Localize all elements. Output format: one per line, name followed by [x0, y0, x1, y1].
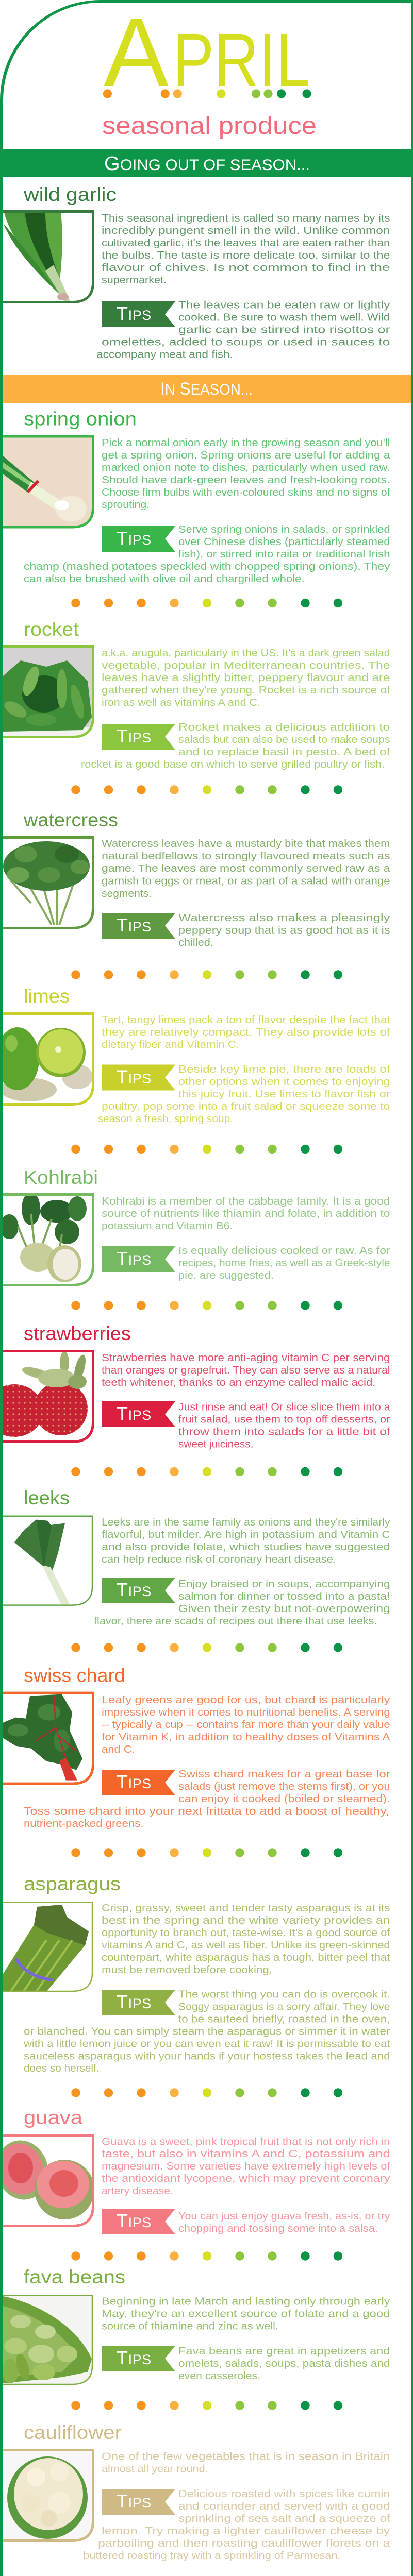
tips text: salads but can also be used to make soups	[178, 734, 390, 745]
body text	[102, 838, 391, 900]
dots divider	[71, 599, 342, 607]
tips text: omelets, salads, soups, pasta dishes and	[178, 2358, 390, 2369]
body text: gathered when they're young. Rocket is a rich source of	[102, 685, 390, 696]
tips text	[23, 1989, 390, 2074]
body text: supermarket.	[102, 275, 167, 286]
section: strawberries	[0, 1323, 390, 1450]
tips text: this juicy fruit. Use limes to flavor fish or	[178, 1089, 390, 1100]
section: rocket	[0, 619, 390, 770]
body text	[102, 1694, 390, 1755]
tips text: to be sauteed briefly, roasted in the oven,	[178, 2014, 390, 2025]
body text: natural bedfellows to strongly flavoured meats such as	[102, 851, 390, 862]
section: leeks	[0, 1487, 390, 1627]
tips text: The worst thing you can do is overcook it.	[178, 1989, 390, 2001]
tips text: chilled.	[178, 937, 213, 948]
tips text	[94, 1579, 390, 1627]
body text	[102, 213, 390, 286]
tips banner	[102, 1770, 175, 1795]
tips text: Serve spring onions in salads, or sprinkled	[178, 524, 390, 535]
heading: Kohlrabi	[24, 1167, 98, 1188]
tips banner	[102, 2209, 175, 2234]
tips banner	[102, 2346, 175, 2371]
body text: Kohlrabi is a member of the cabbage family. It is a good	[102, 1196, 390, 1207]
tips text	[178, 1402, 390, 1450]
dots divider	[71, 1145, 342, 1154]
tips banner: TIPS	[117, 725, 152, 747]
heading: wild garlic	[23, 184, 117, 205]
tips text: Toss some chard into your next frittata to add a boost of healthy,	[24, 1806, 389, 1817]
body text: segments.	[102, 888, 152, 900]
body text: source of nutrients like thiamin and folate, in addition to	[102, 1208, 390, 1219]
body text: can help reduce risk of coronary heart disease.	[102, 1554, 336, 1565]
body text: opportunity to branch out, taste-wise. It's a good source of	[102, 1927, 390, 1939]
section: swiss chard	[0, 1665, 390, 1829]
photo: wild garlic	[3, 210, 94, 303]
heading: swiss chard	[24, 1665, 125, 1686]
tips text: Delicious roasted with spices like cumin	[178, 2488, 390, 2500]
body text	[102, 1517, 390, 1565]
dots divider	[71, 785, 342, 794]
band: going out of season	[3, 149, 411, 177]
tips text	[98, 1064, 390, 1125]
tips text: salads (just remove the stems first), or you	[178, 1781, 390, 1792]
body text	[102, 1014, 390, 1050]
tips banner	[102, 724, 175, 750]
tips text	[178, 2346, 390, 2382]
tips banner: TIPS	[117, 1991, 152, 2012]
heading: leeks	[24, 1487, 70, 1509]
tips banner	[102, 913, 175, 939]
body text: flavorful, but milder. Are high in potassium and Vitamin C	[102, 1529, 390, 1540]
tips text: You can just enjoy guava fresh, as-is, or try	[178, 2211, 390, 2222]
section: fava beans	[0, 2266, 390, 2393]
title: April: PRIL	[173, 18, 310, 103]
tips banner: TIPS	[117, 1248, 152, 1269]
body text	[102, 437, 390, 511]
tips text: sweet juiciness.	[178, 1439, 253, 1450]
body text: May, they're an excellent source of folate and a good	[102, 2308, 390, 2319]
dots divider	[71, 970, 342, 979]
body text: magnesium. Some varieties have extremely high levels of	[102, 2161, 390, 2172]
photo: rocket	[3, 645, 94, 738]
tips banner: TIPS	[117, 528, 152, 549]
dots divider	[71, 2088, 342, 2097]
tips text: accompany meat and fish.	[96, 349, 233, 361]
body text	[102, 2296, 390, 2332]
heading: strawberries	[24, 1323, 131, 1344]
body text: source of thiamine and zinc as well.	[102, 2320, 278, 2332]
tips text: garlic can be stirred into risottos or	[178, 324, 390, 335]
body text: than oranges or grapefruit. They can also serve as a natural	[102, 1365, 390, 1376]
body text: Should have dark-green leaves and fresh-looking roots.	[102, 474, 390, 486]
body text: potassium and Vitamin B6.	[102, 1221, 233, 1232]
body text: garnish to eggs or meat, or as part of a salad with orange	[102, 876, 390, 887]
tips text: rocket is a good base on which to serve grilled poultry or fish.	[81, 759, 385, 770]
body text: incredibly pungent smell in the wild. Unlike common	[102, 225, 390, 236]
section: limes	[0, 986, 390, 1125]
tips banner: TIPS	[117, 1403, 152, 1424]
tips banner	[102, 301, 175, 327]
tips text: flavor, there are scads of recipes out there that use leeks.	[94, 1616, 377, 1627]
dots divider	[71, 1467, 342, 1476]
section: wild garlic	[0, 184, 390, 361]
tips text: sprinkling of sea salt and a squeeze of	[178, 2513, 390, 2524]
body text: best in the spring and the white variety provides an	[102, 1915, 390, 1926]
tips text: Is equally delicious cooked or raw. As for	[178, 1245, 390, 1257]
heading: limes	[24, 986, 70, 1007]
tips banner: TIPS	[117, 1771, 152, 1792]
tips text: or blanched. You can simply steam the asparagus or simmer it in water	[24, 2026, 390, 2038]
heading: watercress	[23, 809, 118, 831]
tips banner	[102, 526, 175, 552]
body text: One of the few vegetables that is in season in Britain	[102, 2451, 390, 2463]
body text: Leeks are in the same family as onions and they're similarly	[102, 1517, 390, 1528]
body text: dietary fiber and Vitamin C.	[102, 1039, 239, 1050]
tips text: poultry, pop some into a fruit salad or squeeze some to	[102, 1101, 390, 1112]
tips text: sauceless asparagus with your hands if your hostess takes the lead and	[24, 2051, 390, 2062]
tips text: champ (mashed potatoes speckled with chopped spring onions). They	[24, 561, 390, 572]
tips text: Just rinse and eat! Or slice slice them into a	[178, 1402, 390, 1413]
heading: spring onion	[24, 408, 137, 430]
body text: Guava is a sweet, pink tropical fruit that is not only rich in	[102, 2136, 390, 2147]
photo: cauliflower	[3, 2449, 94, 2542]
body text: impressive when it comes to nutritional benefits. A serving	[102, 1707, 390, 1718]
body text: flavour of chives. Is not common to find in the	[102, 262, 390, 274]
dots divider	[71, 2401, 342, 2410]
tips text: does so herself.	[24, 2063, 100, 2074]
body text: vegetable, popular in Mediterranean countries. The	[102, 660, 390, 671]
band: in season: IN SEASON...	[160, 379, 253, 399]
tips text: over Chinese dishes (particularly steamed	[178, 536, 390, 548]
tips banner	[102, 1246, 175, 1272]
body text: This seasonal ingredient is called so many names by its	[102, 213, 390, 224]
tips banner	[102, 1990, 175, 2015]
tips text	[96, 299, 390, 361]
section: cauliflower	[0, 2422, 391, 2562]
tips text: lemon. Try making a lighter cauliflower cheese by	[102, 2526, 390, 2537]
tips text: and coriander and served with a good	[178, 2501, 390, 2512]
tips text	[24, 1769, 390, 1829]
tips text: Swiss chard makes for a great base for	[178, 1769, 390, 1780]
heading: asparagus	[24, 1873, 121, 1894]
body text: and C.	[102, 1744, 135, 1755]
tips text: even casseroles.	[178, 2370, 260, 2382]
dots divider	[71, 1643, 342, 1652]
body text: teeth whitener, thanks to an enzyme called malic acid.	[102, 1377, 375, 1388]
body text: iron as well as vitamins A and C.	[102, 697, 260, 708]
tips text: pie. are suggested.	[178, 1270, 274, 1281]
heading: fava beans	[24, 2266, 125, 2287]
body text: cultivated garlic, it's the leaves that are eaten rather than	[102, 238, 390, 249]
tips text	[178, 2211, 390, 2234]
photo: asparagus	[3, 1902, 93, 1992]
tips banner	[102, 1578, 175, 1603]
body text: Choose firm bulbs with even-coloured skins and no signs of	[102, 487, 390, 498]
heading: rocket	[24, 619, 79, 640]
tips text: Fava beans are great in appetizers and	[178, 2346, 390, 2357]
tips text: peppery soup that is as good hot as it is	[178, 925, 390, 936]
body text: Crisp, grassy, sweet and tender tasty asparagus is at its	[102, 1903, 390, 1914]
tips text	[81, 722, 390, 770]
body text: and also provide folate, which studies have suggested	[102, 1541, 390, 1553]
body text: Strawberries have more anti-aging vitamin C per serving	[102, 1352, 390, 1364]
tips text	[178, 912, 390, 948]
tips text: Rocket makes a delicious addition to	[178, 722, 390, 733]
body text: Tart, tangy limes pack a ton of flavor despite the fact that	[102, 1014, 390, 1026]
body text	[102, 1352, 390, 1388]
tips text: and to replace basil in pesto. A bed of	[178, 747, 390, 758]
tips text: can enjoy it cooked (boiled or steamed).	[178, 1793, 390, 1805]
body text: Watercress leaves have a mustardy bite that makes them	[102, 838, 390, 850]
tips text: nutrient-packed greens.	[24, 1818, 143, 1829]
body text: they are relatively compact. They also provide lots of	[102, 1027, 390, 1038]
tips text: other options when it comes to enjoying	[178, 1076, 390, 1088]
photo: limes	[3, 1012, 94, 1106]
tips banner: TIPS	[117, 1579, 152, 1600]
tips text: throw them into salads for a little bit of	[178, 1427, 390, 1438]
tips text	[178, 1245, 390, 1281]
tips text: chopping and tossing some into a salsa.	[178, 2223, 378, 2234]
tips text: fish), or stirred into raita or traditional Irish	[178, 549, 390, 560]
body text: leaves have a slightly bitter, peppery flavour and are	[102, 672, 390, 684]
section: spring onion	[0, 408, 390, 585]
tips banner	[102, 2489, 175, 2515]
body text: the bulbs. The taste is more delicate too, similar to the	[102, 250, 390, 261]
tips text: parboiling and then roasting cauliflower florets on a	[98, 2538, 391, 2549]
tips text: Watercress also makes a pleasingly	[178, 912, 390, 924]
tips text	[24, 524, 390, 585]
tips text: season a fresh, spring soup.	[98, 1113, 233, 1125]
body text: the antioxidant lycopene, which may prevent coronary	[102, 2173, 390, 2184]
band: going out of season: GOING OUT OF SEASON...	[104, 153, 310, 175]
dots divider	[71, 2251, 342, 2261]
heading: guava	[24, 2107, 82, 2128]
tips banner: TIPS	[117, 1066, 152, 1087]
title: April	[104, 0, 310, 107]
tips text: omelettes, added to soups or used in sauces to	[102, 336, 390, 348]
heading: cauliflower	[24, 2422, 122, 2443]
photo: watercress	[3, 836, 94, 929]
body text	[102, 2451, 390, 2475]
body text: game. The leaves are most commonly served raw as a	[102, 863, 391, 874]
body text	[102, 1903, 390, 1976]
tips banner: TIPS	[117, 303, 152, 324]
tips text: The leaves can be eaten raw or lightly	[178, 299, 390, 311]
tips text: can also be brushed with olive oil and chargrilled whole.	[24, 573, 304, 585]
tips text: Given their zesty but not-overpowering	[178, 1603, 390, 1615]
body text	[102, 1196, 390, 1232]
body text: get a spring onion. Spring onions are useful for adding a	[102, 450, 390, 461]
title dots	[103, 89, 311, 98]
tips text: Soggy asparagus is a sorry affair. They love	[178, 2002, 390, 2013]
tips text: Beside key lime pie, there are loads of	[178, 1064, 390, 1075]
body text	[102, 2136, 390, 2197]
body text: artery disease.	[102, 2185, 173, 2197]
photo: fava beans	[3, 2295, 93, 2385]
body text: must be removed before cooking,	[102, 1964, 272, 1976]
tips text: salmon for dinner or tossed into a pasta!	[178, 1591, 390, 1602]
body text: almost all year round.	[102, 2464, 208, 2475]
body text: marked onion note to dishes, particularly when used raw.	[102, 462, 390, 473]
photo: leeks	[3, 1516, 93, 1606]
tips text: cooked. Be sure to wash them well. Wild	[178, 312, 390, 323]
body text: Pick a normal onion early in the growing season and you'll	[102, 437, 390, 449]
section: guava	[0, 2107, 390, 2234]
photo: swiss chard	[3, 1692, 94, 1785]
body text: vitamins A and C, as well as fiber. Unlike its green-skinned	[102, 1940, 390, 1951]
body text: Beginning in late March and lasting only through early	[102, 2296, 390, 2307]
subtitle: seasonal produce	[102, 112, 317, 140]
photo: strawberries	[3, 1350, 94, 1443]
body text: counterpart, white asparagus has a tough, bitter peel that	[102, 1952, 390, 1963]
title: April: A	[104, 0, 169, 107]
dots divider	[71, 1848, 342, 1857]
body text	[102, 648, 390, 708]
body text: sprouting.	[102, 499, 150, 511]
body text: -- typically a cup -- contains far more than your daily value	[102, 1719, 390, 1731]
tips banner	[102, 1401, 175, 1427]
tips text	[83, 2488, 391, 2562]
tips banner: TIPS	[117, 914, 152, 936]
band: in season	[3, 375, 411, 403]
tips banner: TIPS	[117, 2490, 152, 2512]
section: kohlrabi	[0, 1167, 390, 1291]
tips text: with a little lemon juice or you can even eat it raw! It is permissable to eat	[23, 2039, 390, 2050]
body text: Leafy greens are good for us, but chard is particularly	[102, 1694, 390, 1706]
tips text: fruit salad, use them to top off desserts, or	[178, 1414, 390, 1426]
section: asparagus	[0, 1873, 390, 2074]
body text: for Vitamin K, in addition to healthy doses of Vitamins A	[102, 1732, 390, 1743]
tips banner: TIPS	[117, 2347, 152, 2368]
dots divider	[71, 1301, 342, 1310]
photo: spring onion	[3, 435, 94, 529]
tips banner: TIPS	[117, 2210, 152, 2231]
body text: a.k.a. arugula, particularly in the US. It's a dark green salad	[102, 648, 390, 659]
body text: taste, but also in vitamins A and C, potassium and	[102, 2148, 390, 2160]
tips text: recipes, home fries, as well as a Greek-style	[178, 1258, 390, 1269]
tips banner	[102, 1064, 175, 1090]
photo: guava	[3, 2134, 94, 2227]
photo: kohlrabi	[3, 1193, 94, 1286]
tips text: buttered roasting tray with a sprinkling of Parmesan.	[83, 2550, 340, 2562]
section: watercress	[0, 809, 391, 948]
tips text: Enjoy braised or in soups, accompanying	[178, 1579, 390, 1590]
